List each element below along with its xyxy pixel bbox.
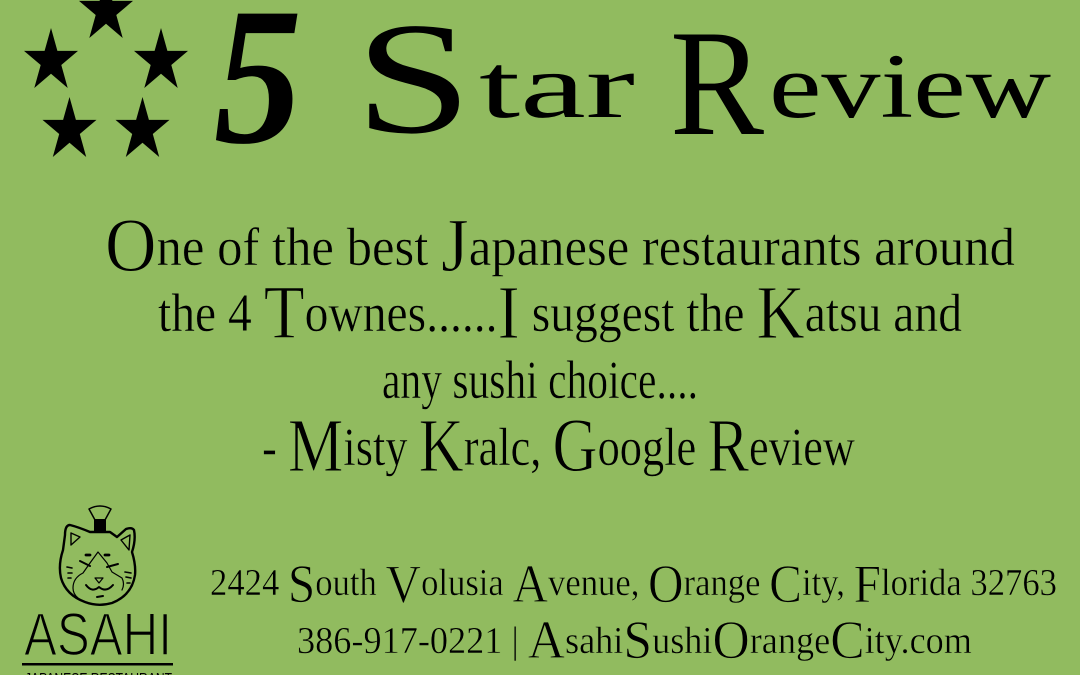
title: tar [479,35,635,137]
review quote: J [441,204,469,288]
address and contact: O [713,610,750,670]
review quote: ne of the best [157,217,441,277]
review quote: G [552,404,598,488]
title: R [670,0,765,167]
address and contact: ushi [652,620,713,662]
address and contact: lorida 32763 [881,562,1057,604]
review quote: K [419,404,464,488]
review quote: T [264,271,305,355]
address and contact: sahi [565,620,623,662]
review quote: ralc, [464,417,552,477]
title [214,0,1052,185]
address and contact: ity.com [865,620,972,662]
review quote: isty [343,417,419,477]
logo wordmark: ASAHI [24,601,172,668]
title: eview [769,35,1052,137]
review quote: I [498,271,520,355]
address and contact: range [750,620,830,662]
address and contact: venue, [548,562,648,604]
logo rule [22,663,173,666]
review quote: any sushi choice.... [382,350,698,410]
review quote: K [756,271,805,355]
icon: cat face [60,506,135,605]
address and contact: V [386,554,421,614]
address and contact: A [528,610,565,670]
address and contact: ity, [802,562,854,604]
icon: five stars [24,0,188,157]
logo: Asahi cat [22,506,173,675]
address and contact [210,554,1057,670]
address and contact: 386-917-0221 | [297,620,529,662]
review quote: eview [749,417,855,477]
review quote [105,204,1015,488]
review quote: - [262,417,280,477]
review quote: O [105,204,157,288]
address and contact: C [769,554,802,614]
address and contact: 2424 [210,562,286,604]
review quote: suggest the [520,283,756,343]
review quote: ownes...... [305,283,498,343]
address and contact: outh [315,562,386,604]
review quote: the 4 [158,283,264,343]
address and contact: S [288,554,315,614]
address and contact: S [623,610,652,670]
review quote: R [707,404,749,488]
address and contact: range [684,562,769,604]
address and contact: O [648,554,684,614]
review quote: oogle [598,417,707,477]
address and contact: C [830,610,865,670]
address and contact: olusia [421,562,512,604]
address and contact: A [512,554,548,614]
review quote: M [288,404,343,488]
review quote: atsu and [805,283,962,343]
review quote: apanese restaurants around [469,217,1015,277]
address and contact: F [854,554,881,614]
